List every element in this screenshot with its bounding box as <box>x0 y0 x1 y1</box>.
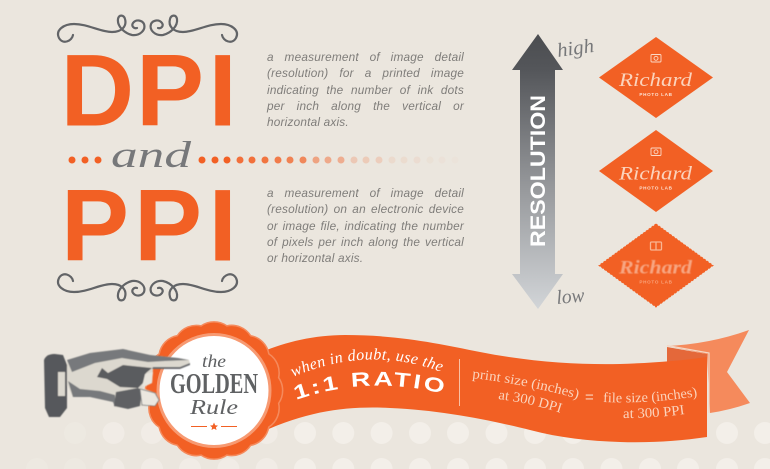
hand body <box>67 349 190 408</box>
resolution arrow <box>512 34 563 309</box>
ribbon divider <box>458 359 460 406</box>
PPI description: (resolution) on an electronic device <box>267 202 464 216</box>
knuckle shadow <box>114 388 142 409</box>
logo diamond: low resolution: PHOTO LAB <box>639 280 673 284</box>
print size formula <box>472 370 578 413</box>
badge the: the <box>202 351 226 371</box>
PPI description: a measurement of image detail <box>267 186 464 200</box>
PPI description: or image file, indicating the number <box>267 218 464 232</box>
DPI heading: DPI <box>60 34 237 148</box>
bottom flourish <box>58 274 237 300</box>
ratio heading: 1:1 RATIO <box>294 372 444 400</box>
PPI heading: PPI <box>61 168 237 282</box>
polka dot background <box>26 422 770 469</box>
palm shadow <box>97 365 152 388</box>
arrow label: RESOLUTION <box>526 95 550 247</box>
hand top shading <box>67 349 189 372</box>
high label: high <box>556 35 595 62</box>
file size formula: file size (inches) <box>604 387 697 404</box>
ribbon body <box>262 335 707 442</box>
finger underside <box>152 363 190 369</box>
camera icon <box>651 54 661 62</box>
icon: pointing hand <box>44 349 190 417</box>
and script: and <box>111 135 192 176</box>
DPI description: per inch along the vertical or <box>267 99 464 113</box>
badge GOLDEN: GOLDEN <box>170 369 258 400</box>
DPI description: horizontal axis. <box>267 115 349 129</box>
logo diamond: medium resolution <box>599 130 713 212</box>
PPI description <box>267 186 464 265</box>
dotted divider <box>68 156 458 164</box>
logo diamond: medium resolution: Richard <box>618 164 693 184</box>
middle finger highlight <box>142 372 153 387</box>
DPI description: indicating the number of ink dots <box>267 82 464 96</box>
ribbon banner <box>268 330 750 442</box>
ribbon tail <box>667 330 750 413</box>
file size formula <box>604 387 697 418</box>
print size formula: print size (inches) <box>472 370 578 400</box>
print size formula: at 300 DPI <box>498 392 563 413</box>
badge Rule: Rule <box>189 395 238 419</box>
logo diamond: low resolution <box>599 224 713 307</box>
hand lower shading <box>68 381 115 407</box>
ribbon intro script: when in doubt, use the <box>290 348 443 376</box>
DPI description <box>266 50 464 129</box>
logo diamond: high resolution: Richard <box>618 70 693 91</box>
thumb tip <box>140 389 159 406</box>
cuff highlight <box>58 372 65 396</box>
camera icon <box>651 148 661 156</box>
logo diamond: high resolution: PHOTO LAB <box>639 92 673 97</box>
logo diamond: high resolution <box>599 37 713 118</box>
golden rule badge <box>134 311 294 469</box>
PPI description: or horizontal axis. <box>267 251 363 265</box>
DPI description: a measurement of image detail <box>267 50 464 64</box>
camera icon <box>650 242 662 250</box>
ribbon fold <box>667 347 707 362</box>
badge star rule <box>191 422 237 430</box>
DPI description: (resolution) for a printed image <box>267 66 464 80</box>
low label: low <box>556 285 586 309</box>
logo diamond: medium resolution: PHOTO LAB <box>639 186 673 190</box>
equals sign: = <box>585 389 594 406</box>
top flourish <box>58 16 237 42</box>
PPI description: of pixels per inch along the vertical <box>267 235 464 249</box>
cuff <box>44 354 67 417</box>
file size formula: at 300 PPI <box>624 405 684 418</box>
logo diamond: low resolution: Richard <box>618 258 693 278</box>
